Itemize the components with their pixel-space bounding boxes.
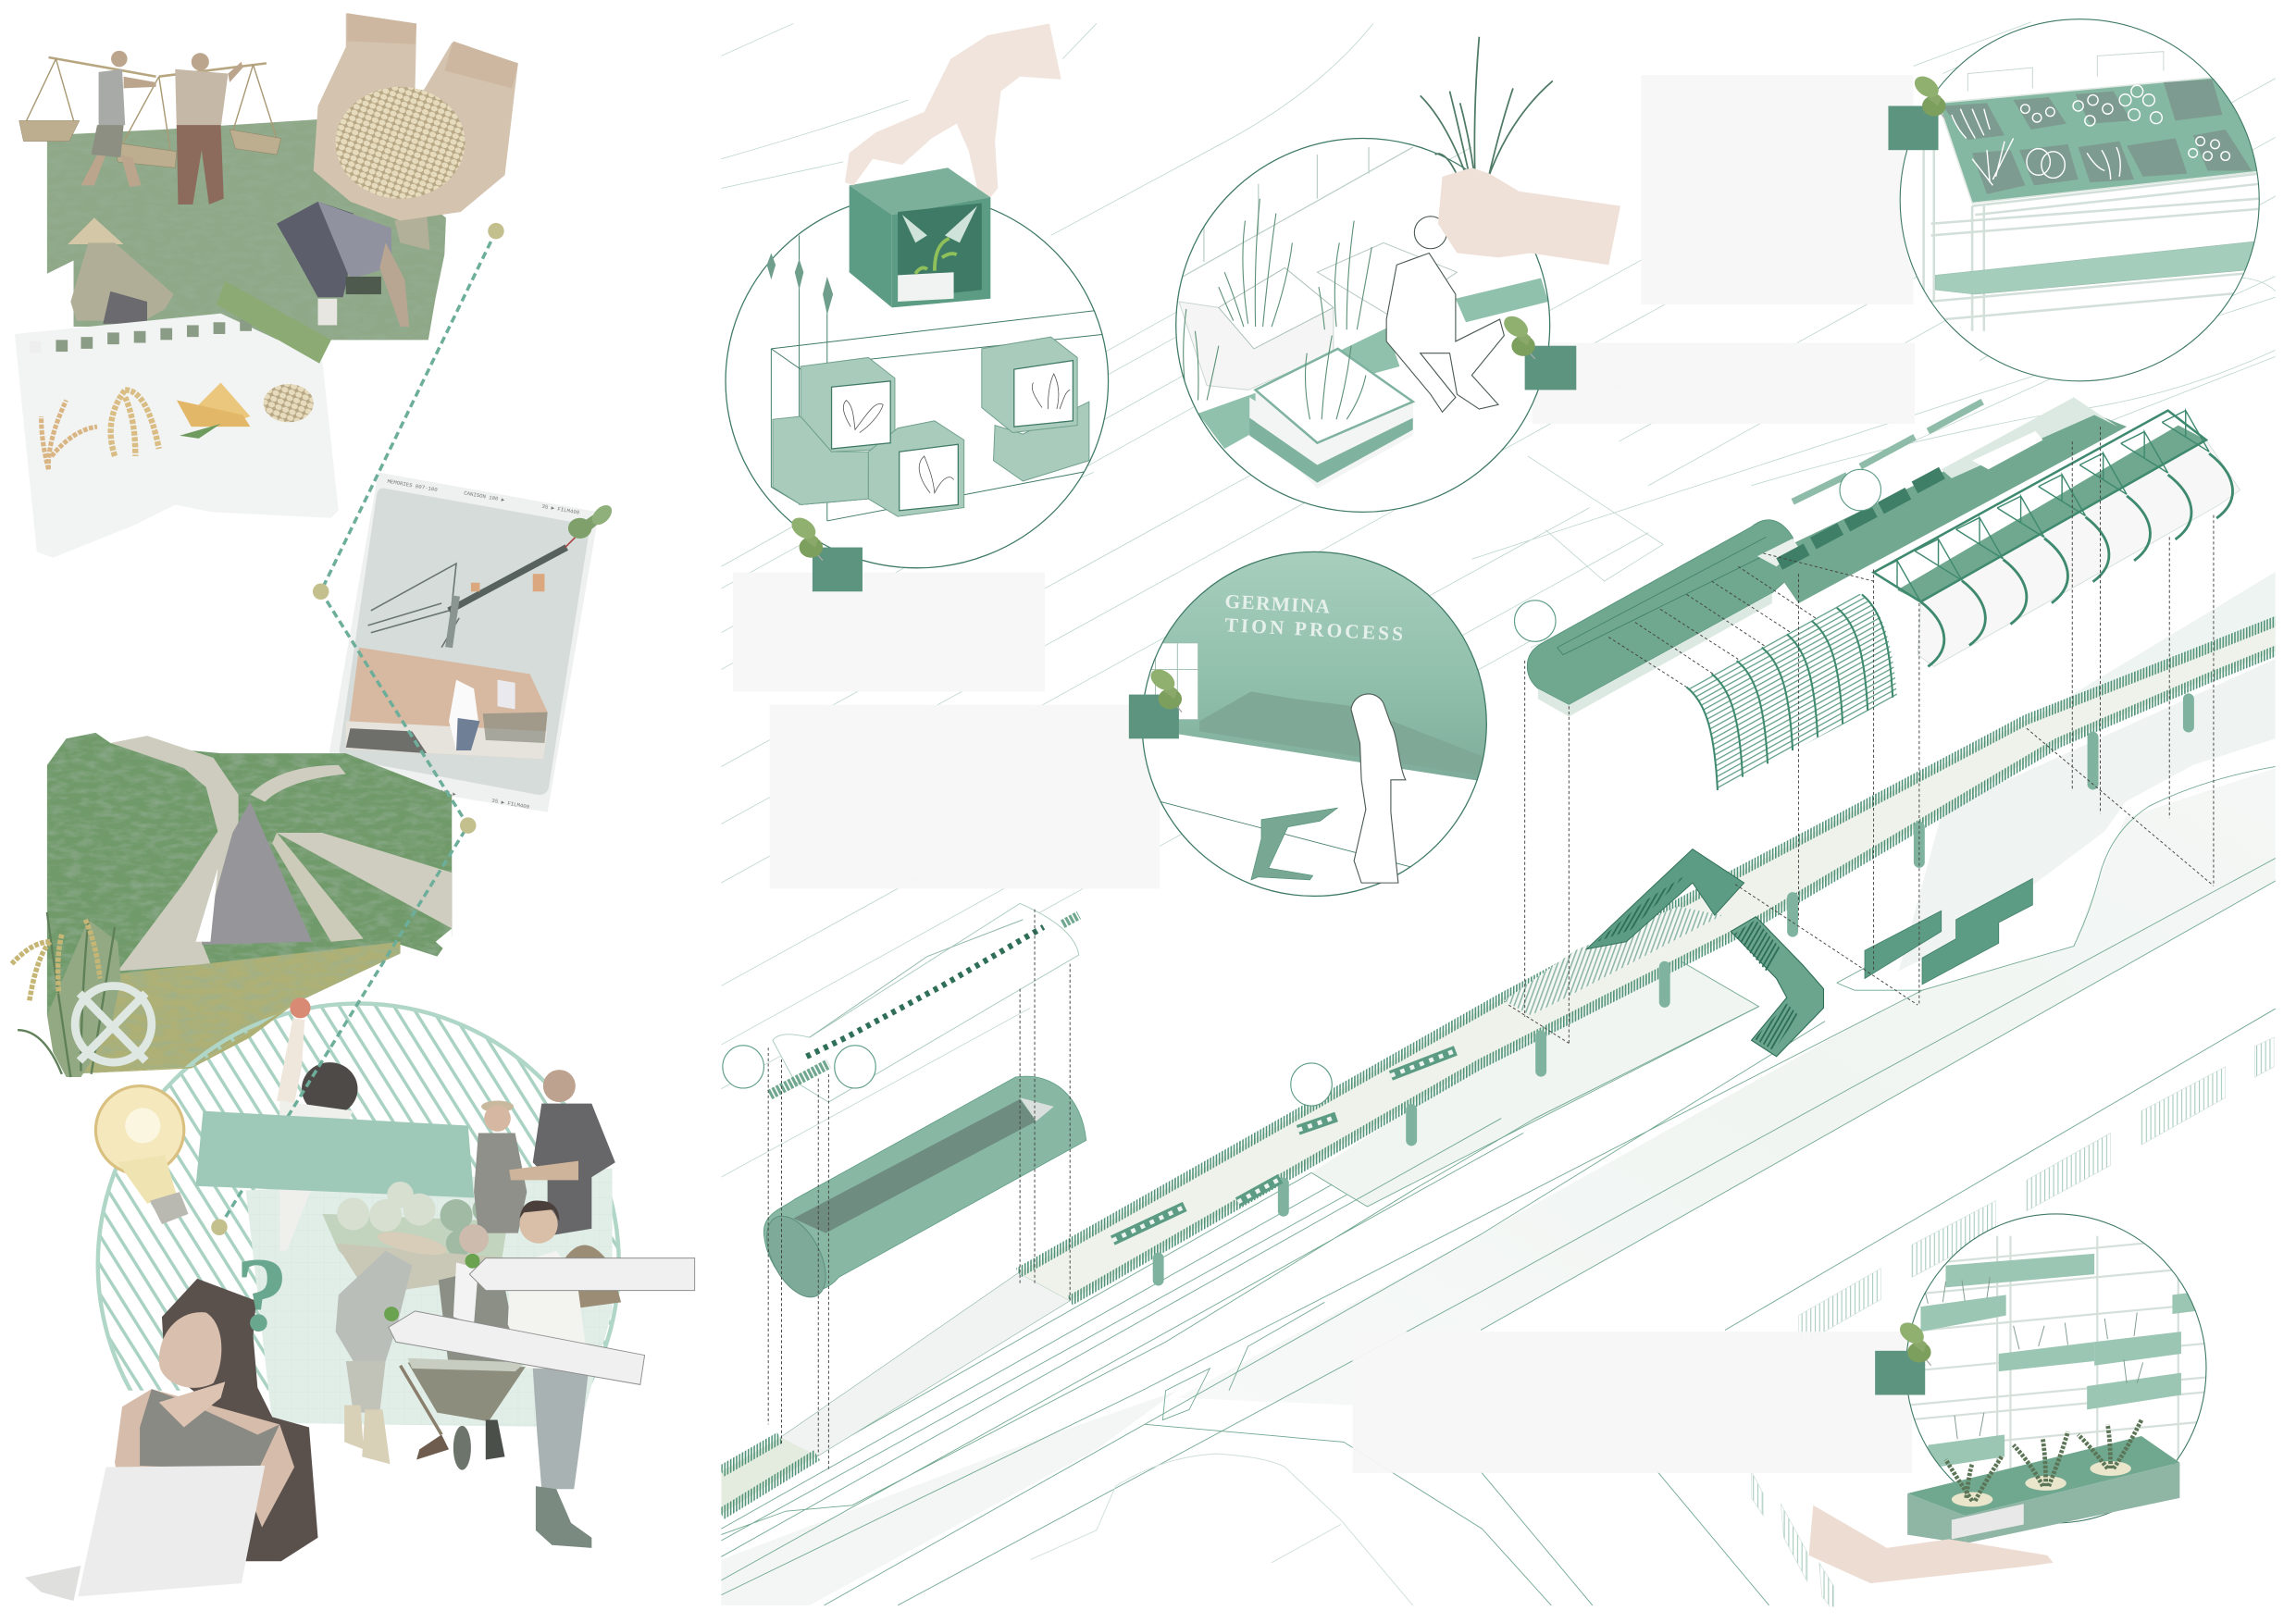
- green tape banner: [196, 1111, 474, 1197]
- benches on slab: [1776, 467, 1945, 570]
- card caption marks: MEMORIES 007-100: [387, 478, 439, 493]
- re-draw field over circle: [69, 1000, 299, 1074]
- question mark: ?: [235, 1236, 289, 1354]
- ferns: [1945, 1420, 2141, 1501]
- laptop: [25, 1466, 265, 1601]
- hat farmer: [68, 217, 174, 324]
- text placeholder box 5: [1353, 1332, 1912, 1473]
- thinking woman: [115, 1279, 318, 1561]
- plant sketches: [1924, 1277, 2143, 1439]
- exploded slab roof: [1527, 397, 2127, 716]
- dashed projection lines: [768, 427, 2214, 1471]
- person reaching with apple: [277, 997, 357, 1251]
- icon: push pin: [1500, 312, 1535, 359]
- icon: crossed circle: [75, 985, 152, 1062]
- icon: push pin: [1896, 1319, 1931, 1366]
- perimeter fence: [1752, 1037, 2274, 1611]
- card caption marks: MEMORIES 007-100: [341, 773, 392, 787]
- label tab: [1888, 105, 1939, 150]
- masking tape: [217, 281, 331, 364]
- highway photo: [12, 733, 452, 1077]
- icon: push pin: [565, 502, 615, 548]
- wall title: [1225, 595, 1402, 640]
- older man: [439, 1224, 515, 1376]
- label tab: [1525, 346, 1576, 390]
- bending farmer: [277, 202, 429, 327]
- worker with hat and boots: [336, 1227, 449, 1464]
- ground shading: [721, 566, 2284, 1605]
- elevated walkway deck and railings: [721, 618, 2284, 1514]
- panel: isometric site drawing: [721, 22, 2284, 1611]
- text placeholder box 4: [1533, 343, 1915, 424]
- lower shelf: [1935, 242, 2256, 294]
- card caption marks: [341, 478, 580, 811]
- pendant lamps: [767, 254, 833, 315]
- text placeholder box 3: [1641, 75, 1914, 304]
- hand under planter: [1809, 1505, 2054, 1583]
- floor line: [1160, 801, 1410, 867]
- road edge lines: [721, 765, 2284, 1605]
- dashed connector: [219, 231, 496, 1227]
- construction photo card: [325, 472, 615, 812]
- label tab: [813, 548, 863, 591]
- wall title: TION PROCESS: [1224, 613, 1405, 645]
- crate cells: [1942, 80, 2252, 194]
- vegetable sketches: [1952, 85, 2229, 185]
- inset circle: vertical planter wall: [1809, 1214, 2222, 1583]
- rice plant: [12, 912, 120, 1077]
- site base road lines: [721, 22, 2284, 1605]
- icon: wheat: [42, 401, 97, 469]
- hanging planters: [1920, 1254, 2208, 1468]
- support columns: [1159, 699, 2189, 1280]
- farmers carrying baskets: [19, 51, 281, 204]
- wheelbarrow: [401, 1358, 526, 1470]
- green cube with seedling: [850, 167, 990, 307]
- label tab: [1875, 1351, 1925, 1395]
- green panels in plaza: [1865, 878, 2032, 985]
- large planter box: [1907, 1436, 2179, 1543]
- rice field swath: [69, 942, 401, 1074]
- icon: corn: [177, 382, 250, 439]
- connector node dots: [211, 223, 504, 1235]
- hand holding cube: [845, 23, 1061, 197]
- kiosk: [1251, 808, 1338, 880]
- smiling woman with basket: [508, 1200, 621, 1548]
- text placeholder box 1: [733, 573, 1045, 691]
- planters on walkway: [1112, 1050, 1456, 1241]
- stair deck hatch: [1504, 907, 1722, 1015]
- grid paper panel: [246, 1169, 613, 1428]
- shelf frame: [1924, 103, 2259, 331]
- box windows with sketch plants: [832, 361, 1073, 511]
- west walkway deck: [780, 1273, 1070, 1456]
- torn notebook paper: [15, 281, 339, 558]
- icon: rice: [111, 390, 159, 456]
- exploded green tube: [755, 1076, 1086, 1307]
- icon: push pin: [788, 514, 823, 561]
- fruit basket: [322, 1182, 508, 1295]
- cupped hands with beans: [314, 13, 518, 221]
- light bulb: [95, 1086, 189, 1224]
- green stair south: [1731, 917, 1823, 1057]
- roads: [110, 736, 452, 972]
- long planter bars: [1793, 402, 1982, 502]
- inset circle: germination wall: [1129, 544, 1501, 896]
- inset circle: germination boxes: [726, 23, 1109, 591]
- hand gripping grass: [1421, 37, 1620, 265]
- wall title: GERMINA: [1224, 590, 1332, 618]
- inset circle: produce shelf: [1888, 19, 2266, 381]
- white vault with truss: [1874, 411, 2240, 666]
- callout ring markers: [723, 469, 1881, 1106]
- text placeholder box 2: [770, 705, 1160, 888]
- ribbed canopy: [1687, 593, 1897, 790]
- card caption marks: CANISON 100 ▶: [415, 784, 457, 798]
- seated figure outline: [1386, 217, 1504, 412]
- icon: soybeans: [264, 384, 314, 422]
- card caption marks: 35 ▶ FILM400: [541, 503, 580, 516]
- couple with crate: [474, 1070, 615, 1236]
- hatched circle backdrop: [96, 1002, 620, 1526]
- icon: push pin: [1147, 665, 1182, 712]
- exploded tube roof outline with trees: [770, 903, 1079, 1102]
- reeds: [1184, 199, 1371, 419]
- worker and hoarding: [346, 648, 548, 760]
- left collage: paddy field photo: [19, 51, 446, 340]
- icon: push pin: [1911, 72, 1945, 119]
- frame: [1907, 1236, 2222, 1501]
- inset circle: planter seating: [1176, 37, 1620, 512]
- crane: [368, 548, 566, 648]
- callout banner 1: [465, 1254, 695, 1291]
- mini boxes: [773, 337, 1089, 516]
- callout banner 2: [384, 1307, 645, 1384]
- card caption marks: CANISON 100 ▶: [464, 489, 505, 503]
- standing figure outline: [1351, 694, 1406, 883]
- green stair north: [1586, 849, 1744, 949]
- card caption marks: 35 ▶ FILM400: [491, 798, 530, 811]
- label tab: [1129, 695, 1179, 738]
- planters: [1179, 267, 1334, 390]
